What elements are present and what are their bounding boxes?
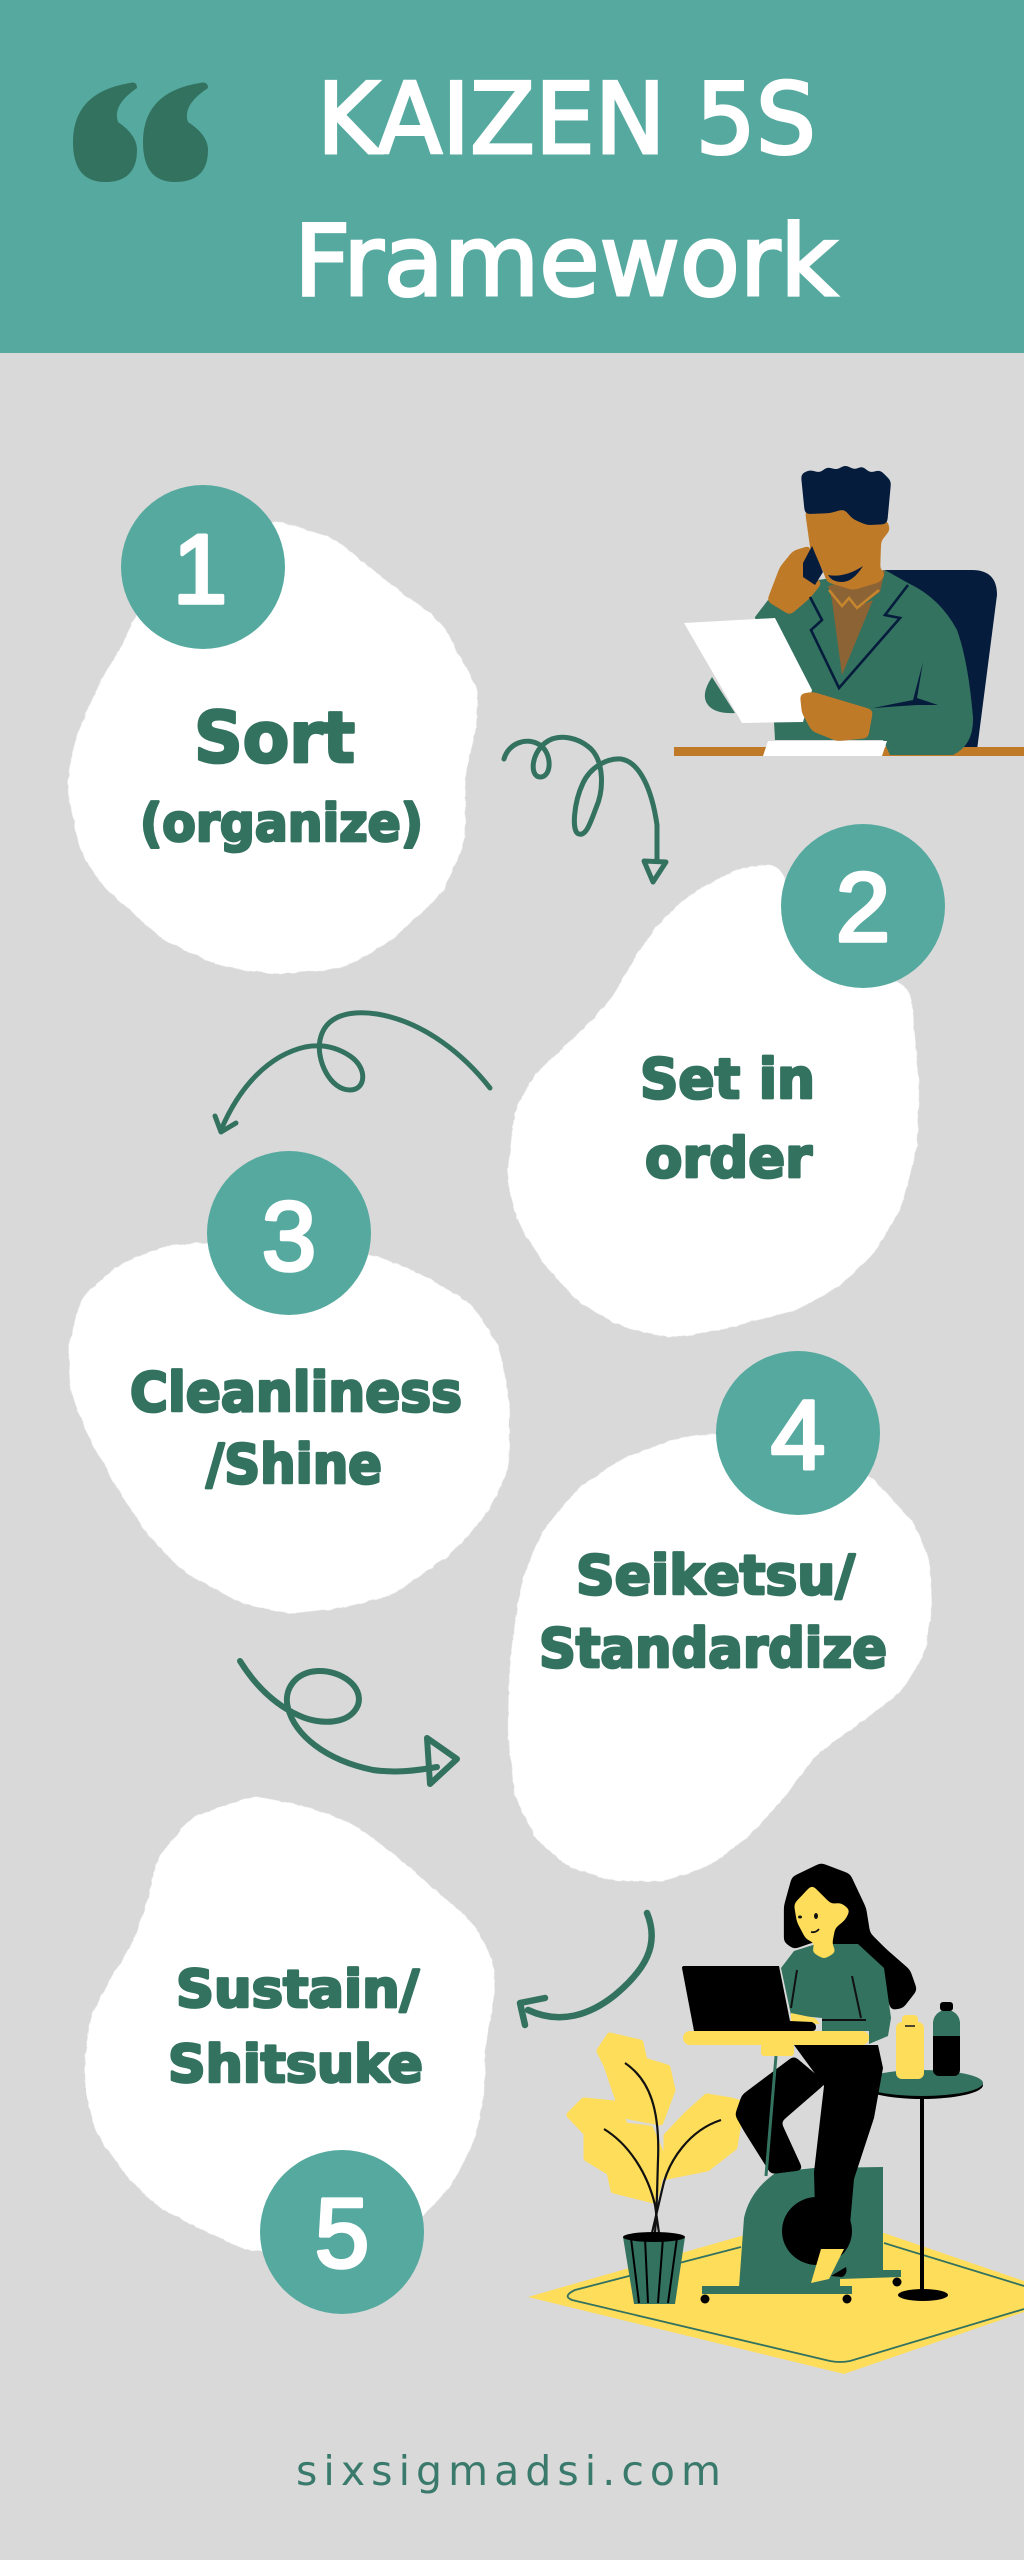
heading: set in order: order (645, 1126, 812, 1190)
panel: step 5 sustain (83, 1794, 497, 2314)
number badge 2: 2 (836, 852, 890, 962)
heading: sustain shitsuke (168, 1960, 423, 2095)
hand on phone (767, 545, 822, 615)
feet (811, 2249, 844, 2283)
torso (781, 1944, 891, 2044)
heading: seiketsu standardize: Seiketsu/ (576, 1544, 855, 1607)
heading: sustain shitsuke: Sustain/ (176, 1960, 419, 2020)
chair (885, 570, 997, 750)
illustration: man reading at desk (674, 465, 1024, 756)
header banner (0, 0, 1024, 353)
title: Framework (294, 205, 837, 319)
arrow: step 4 to 5 (520, 1913, 652, 2025)
icon: quotation marks (73, 83, 208, 182)
panel: step 4 seiketsu (506, 1351, 934, 1883)
number badge 5: 5 (315, 2178, 369, 2288)
desk (674, 747, 1024, 756)
lapels (810, 585, 908, 688)
heading: sort (140, 697, 423, 854)
heading: set in order: Set in (640, 1047, 815, 1111)
footer website: sixsigmadsi.com (296, 2447, 721, 2495)
plant pot (623, 2232, 685, 2304)
number badge 4: 4 (771, 1380, 825, 1490)
bike wheel (782, 2197, 852, 2265)
bike body (739, 2167, 901, 2287)
panel: step 1 sort (65, 485, 480, 976)
bent leg (735, 2056, 826, 2174)
yellow bottle (896, 2015, 924, 2079)
arrow: step 3 to 4 (240, 1661, 457, 1784)
hair (801, 465, 891, 525)
number badge 5 (260, 2150, 424, 2314)
desk top (683, 2031, 869, 2056)
heading: cleanliness shine (130, 1361, 462, 1496)
sleeve crease (873, 662, 938, 708)
panel: step 3 cleanliness (66, 1151, 511, 1616)
blob 3 (66, 1240, 511, 1616)
panel: step 2 set in order (505, 824, 945, 1340)
arrow: step 2 to 3 (215, 1013, 490, 1132)
face (805, 505, 890, 590)
paper on desk (763, 741, 887, 756)
heading: sustain shitsuke: Shitsuke (168, 2035, 423, 2095)
heading: cleanliness shine: /Shine (206, 1433, 382, 1496)
jacket (755, 570, 973, 755)
illustration: woman on exercise bike (528, 1863, 1024, 2374)
plant stems (604, 2063, 721, 2233)
title: KAIZEN 5S (317, 63, 816, 177)
plant leaves (570, 2036, 741, 2200)
heading: seiketsu standardize: Standardize (539, 1617, 887, 1680)
heading: seiketsu standardize (539, 1544, 887, 1680)
heading: sort: (organize) (140, 794, 423, 854)
blob 4 (506, 1431, 934, 1883)
blob 2 (505, 862, 921, 1340)
heading: sort: Sort (194, 697, 355, 779)
hair (784, 1863, 917, 2010)
bike base and casters (700, 2278, 902, 2304)
heading: set in order (640, 1047, 815, 1190)
blob 1 (65, 518, 480, 976)
laptop (682, 1966, 816, 2031)
face (794, 1885, 850, 1959)
heading: cleanliness shine: Cleanliness (130, 1361, 462, 1424)
arrow: step 1 to 2 (504, 737, 666, 882)
right hand (800, 692, 873, 741)
standing leg (794, 2045, 883, 2249)
paper held (684, 618, 812, 723)
number badge 2 (781, 824, 945, 988)
number badge 1 (121, 485, 285, 649)
number badge 3: 3 (262, 1181, 316, 1291)
rug (528, 2233, 1024, 2374)
blob 5 (83, 1794, 497, 2255)
number badge 3 (207, 1151, 371, 1315)
number badge 4 (716, 1351, 880, 1515)
title (294, 63, 837, 319)
number badge 1: 1 (173, 514, 227, 624)
phone (803, 546, 823, 585)
hand (791, 2013, 820, 2024)
bike pole (766, 2056, 776, 2176)
side table (861, 2070, 983, 2301)
shirt and collar (828, 570, 885, 673)
dark bottle (933, 2002, 960, 2076)
